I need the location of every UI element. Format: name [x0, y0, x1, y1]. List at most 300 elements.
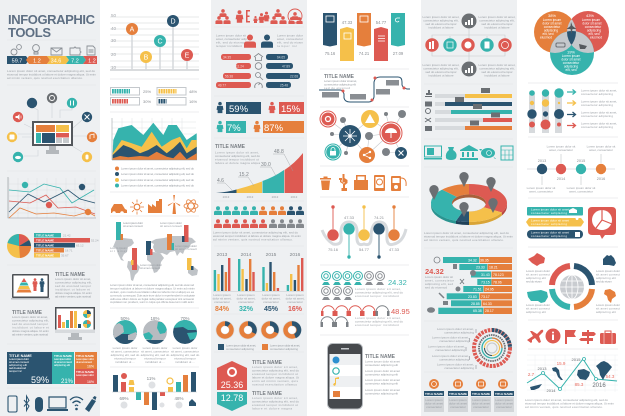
butterfly bars: 56.38: [225, 74, 233, 78]
map line chart: 2.7: [528, 372, 535, 377]
wavy timeline: 75.16: [328, 247, 339, 252]
world map with bars: Lorem ipsum dolor: [140, 263, 162, 267]
butterfly bars: 34.35: [223, 56, 231, 60]
globe ring with maps: adipiscing elit: [596, 310, 616, 314]
org chart: incididunt ut labore: [428, 26, 454, 30]
diverging bar chart: 11%: [147, 376, 155, 381]
footer text: eiusmod tempor incididunt ut labore et dolore magna aliqua. Ut enim: [525, 402, 614, 406]
tab bars: 74.21: [359, 51, 370, 56]
value 48.95: consectetur adipiscing elit, sed do: [355, 320, 403, 324]
four title cards: Lorem ipsum: [495, 398, 513, 402]
globes: eiusmod tempor: [174, 356, 196, 360]
radial chart: consectetur adipiscing: [439, 358, 469, 362]
text block: monitor: [12, 310, 50, 336]
label ribbons: consectetur adipiscing: [531, 222, 567, 226]
horizontal timeline: amet, consectetur: [549, 148, 573, 152]
venn diagram: eiusmod: [590, 36, 602, 40]
phone text: TITLE NAME: [365, 354, 396, 360]
arrows with text: consectetur adipiscing: [581, 125, 613, 129]
stacked horizontal bars: 31.43: [481, 273, 490, 277]
org chart: incididunt ut labore: [484, 26, 510, 30]
text block: monitor: incididunt ut labore et: [12, 326, 49, 330]
people percentage stats: 7%: [227, 123, 241, 134]
globe ring with maps: Lorem ipsum dolor: [596, 269, 620, 273]
venn diagram: Lorem ipsum: [562, 54, 581, 58]
text block: laptop: consectetur adipiscing elit,: [55, 280, 92, 284]
app icons around monitor: [7, 93, 97, 162]
globes: 50%: [120, 316, 130, 321]
laptop with pyramid: [11, 274, 50, 300]
org chart: sed do eiusmod tempor: [481, 70, 513, 74]
dashboard tiles: 16%: [87, 380, 94, 384]
label ribbons: Lorem ipsum dolor sit amet: [531, 230, 569, 234]
pipeline diagram: [319, 74, 410, 102]
yearly bar chart: consectetur: [238, 300, 254, 304]
growth area chart: [215, 144, 303, 199]
dashboard tiles: adipiscing elit: [54, 363, 70, 367]
horizontal bars: TITLE NAME: [36, 244, 54, 248]
org chart: consectetur adipiscing elit,: [479, 18, 515, 22]
value 24.32: eiusmod tempor incididunt: [355, 294, 399, 298]
org chart: sed do eiusmod tempor: [425, 70, 457, 74]
yearly bar chart: consectetur: [214, 300, 230, 304]
gender comparison: amet, consectetur: [277, 37, 303, 41]
world map with bars: Lorem ipsum: [110, 246, 128, 250]
stacked horizontal bars: 73.15: [481, 280, 490, 284]
text block: laptop: [55, 272, 92, 298]
pipeline diagram: sed do eiusmod: [324, 86, 350, 90]
world map with bars: [110, 221, 198, 281]
globes: eiusmod tempor: [144, 356, 166, 360]
wavy timeline: 47.33: [389, 247, 400, 252]
text block: laptop: incididunt ut labore et: [55, 288, 90, 292]
column 1: infographic tools: [7, 12, 99, 412]
area chart legend: Lorem ipsum dolor sit amet, consectetur adipiscing elit, sed do: [121, 166, 194, 170]
tab bars: 47.33: [342, 20, 353, 25]
venn diagram: consectetur: [544, 25, 561, 29]
people grid: [213, 206, 304, 242]
four title cards: consectetur: [496, 405, 512, 409]
world map with bars: sit amet consect: [123, 224, 143, 228]
area chart legend: Lorem ipsum dolor sit amet, consectetur adipiscing elit, sed do: [121, 184, 194, 188]
text blocks beside badges: consectetur adipiscing elit, sed do: [252, 368, 299, 372]
battery gauges: 25%: [143, 89, 151, 94]
gender comparison: amet, consectetur adip: [216, 37, 247, 41]
3D donut: [429, 172, 507, 225]
map line chart: 85.3: [575, 382, 584, 387]
radial chart: [428, 327, 510, 370]
text blocks beside badges: labore et dolore magna: [252, 406, 292, 410]
globe ring with maps: Lorem ipsum dolor: [596, 303, 620, 307]
tagged progress bars: [425, 88, 512, 131]
venn diagram: elit, sed: [542, 32, 554, 36]
dashboard tiles: sit amet consect: [76, 360, 92, 364]
map line chart: 2016: [592, 383, 606, 389]
butterfly bars: 25.48: [280, 84, 288, 88]
people icons row: [215, 9, 303, 24]
gender comparison: [216, 34, 304, 48]
map text: cupidatat non proident, sunt in culpa qui officia deserunt mollit anim: [110, 300, 194, 304]
globes: [111, 316, 200, 364]
globe ring with maps: sit amet consect: [526, 272, 550, 276]
donut gauges: Lorem ipsum dolor sit amet,: [226, 344, 256, 348]
org chart: incididunt ut labore: [428, 74, 454, 78]
radial chart: Lorem ipsum dolor sit amet,: [437, 362, 474, 366]
horizontal bars: [34, 233, 99, 258]
bubble matrix: [527, 88, 564, 133]
phone text: consectetur adipiscing elit: [365, 363, 398, 367]
world map with bars: Lorem ipsum dolor: [160, 221, 182, 225]
pie chart: [7, 234, 31, 258]
pipeline diagram: consectetur adipiscing elit: [324, 82, 356, 86]
stacked horizontal bars: 24.95: [485, 288, 494, 292]
horizontal timeline: Lorem ipsum dolor sit: [527, 186, 556, 190]
yearly bar chart: Lorem ipsum: [213, 293, 231, 297]
globe ring with maps: [526, 253, 620, 314]
globes: adipiscing elit, sed do: [111, 353, 140, 357]
donut text: ad minim veniam, quis nostrud exercitation ullamco.: [424, 238, 504, 242]
four title cards: dolor sit amet: [449, 402, 467, 406]
stacked horizontal bars: 64.33: [483, 302, 492, 306]
gender comparison: tempor inc: [277, 44, 298, 48]
four title cards: Lorem ipsum: [449, 398, 467, 402]
area chart legend: [115, 166, 194, 188]
org chart: sed do eiusmod tempor: [425, 22, 457, 26]
value 48.95: [355, 307, 410, 327]
text blocks beside badges: eiusmod tempor incididunt ut: [252, 372, 298, 376]
map line chart: 2013: [538, 366, 547, 371]
value ribbon: 1.2: [33, 58, 41, 64]
horizontal timeline: Lorem ipsum dolor sit: [567, 186, 596, 190]
bubble chart: D: [170, 18, 176, 26]
globe ring with maps: sit amet consect: [596, 306, 620, 310]
horizontal timeline: 2015: [577, 159, 585, 163]
intro text: eiusmod tempor incididunt ut labore et dolore magna aliqua. Ut enim: [7, 72, 96, 76]
dashboard tiles: Lorem ipsum dolor: [54, 357, 71, 361]
text blocks beside badges: TITLE NAME: [252, 391, 283, 397]
stacked horizontal bars: adipiscing elit, sed: [425, 282, 453, 286]
icon row: devices: [320, 174, 406, 191]
value ribbon: 34.6: [51, 58, 61, 64]
battery gauges: 48%: [189, 89, 197, 94]
butterfly bars: 47.89: [282, 64, 290, 68]
horizontal timeline: 2013: [538, 159, 546, 163]
yearly bar chart: Lorem ipsum: [286, 293, 304, 297]
stacked horizontal bars: Lorem ipsum dolor sit: [425, 275, 453, 279]
text block: monitor: TITLE NAME: [12, 310, 43, 316]
butterfly bars: 64.65: [277, 56, 285, 60]
four title cards: Lorem ipsum: [472, 398, 490, 402]
venn diagram: elit, sed: [566, 68, 577, 72]
dashboard tiles: 16%: [87, 364, 94, 368]
bubble chart: 30: [111, 38, 117, 43]
globes: eiusmod tempor: [114, 356, 136, 360]
arrows with text: consectetur adipiscing: [581, 114, 613, 118]
column 2: [110, 13, 200, 410]
text blocks beside badges: consectetur adipiscing elit, sed do: [252, 400, 299, 404]
venn diagram: 19%: [567, 50, 575, 54]
column 4: [319, 13, 410, 409]
growth area chart: 30.0: [261, 162, 271, 168]
label ribbons: consectetur adipiscing: [531, 234, 567, 238]
radial chart: consectetur adipiscing: [435, 348, 465, 352]
monitor hub: [18, 103, 88, 156]
globes: Lorem ipsum dolor: [173, 346, 197, 350]
people grid: eiusmod tempor incididunt ut labore et dolore magna aliqua. Ut enim: [213, 234, 302, 238]
world map with bars: Lorem ipsum dolor: [175, 244, 197, 248]
yearly bar chart: dolor sit amet,: [213, 296, 232, 300]
map line chart: [527, 355, 618, 393]
map text: Lorem ipsum dolor sit amet, consectetur adipiscing elit, sed do eiusmod: [110, 283, 194, 287]
value ribbon: [7, 56, 97, 64]
dashboard tiles: TITLE NAME: [54, 354, 72, 358]
globes: Lorem ipsum dolor: [143, 346, 167, 350]
title: INFOGRAPHIC: [8, 12, 96, 27]
dashboard tiles: Lorem ipsum dolor: [76, 373, 94, 377]
horizontal bars: TITLE NAME: [36, 254, 54, 258]
stacked horizontal bars: 36.35: [480, 258, 489, 262]
globes: adipiscing elit, sed do: [141, 353, 170, 357]
venn diagram: dolor sit amet: [542, 22, 562, 26]
dashboard tiles: adipiscing elit: [9, 363, 27, 367]
yearly bar chart: Lorem ipsum: [237, 293, 255, 297]
intro text: ad minim veniam, quis nostrud exercitation ullamco.: [7, 76, 83, 80]
phone text: consectetur adipiscing elit: [365, 392, 398, 396]
globe ring with maps: sed do eiusm: [526, 280, 542, 284]
four title cards: consectetur: [473, 405, 489, 409]
world map with bars: sit amet: [110, 249, 127, 253]
arrows with text: [567, 88, 617, 129]
value 48.95: 48.95: [391, 307, 410, 316]
wavy timeline: 54.77: [359, 247, 370, 252]
stacked horizontal bars: amet, consectetur: [425, 278, 454, 282]
stacked horizontal bars: 65.38: [473, 309, 482, 313]
world map with bars: sit amet consect: [140, 266, 160, 270]
donut gauges: Lorem ipsum dolor sit amet,: [270, 344, 300, 348]
four title cards: dolor sit amet: [495, 402, 513, 406]
text blocks beside badges: eiusmod tempor incididunt ut: [252, 403, 298, 407]
dashboard tiles: sit amet consect: [54, 360, 72, 364]
text blocks beside badges: labore et dolore magna aliqua. Ut: [252, 376, 299, 380]
horizontal timeline: Lorem ipsum dolor sit: [547, 144, 576, 148]
horizontal timeline: amet, consectetur: [569, 190, 593, 194]
text block: laptop: Lorem ipsum dolor sit amet,: [55, 277, 91, 281]
people percentage stats: [217, 102, 304, 134]
horizontal timeline: [527, 144, 616, 194]
four title cards: TITLE NAME: [472, 392, 490, 396]
venn diagram: dolor sit amet: [561, 58, 581, 62]
value 24.32: Lorem ipsum dolor sit amet,: [355, 287, 401, 291]
map text: commodo consequat. Duis aute irure dolor in reprehenderit in voluptate: [110, 294, 195, 298]
bubble chart: A: [130, 26, 135, 34]
stacked horizontal bars: 73.17: [481, 295, 490, 299]
people grid: ad minim veniam, quis nostrud exercitation ullamco.: [213, 238, 293, 242]
diverging bar chart: 48%: [174, 396, 184, 401]
donut text: Lorem ipsum dolor sit amet, consectetur adipiscing elit, sed do: [424, 231, 509, 235]
horizontal bars: 21.42: [63, 234, 71, 238]
org chart: Lorem ipsum dolor sit amet,: [422, 15, 460, 19]
yearly bar chart: 45%: [264, 306, 279, 313]
icon row: energy: [111, 195, 198, 215]
venn diagram: 43%: [586, 13, 594, 18]
radial chart: consectetur adipiscing: [439, 339, 469, 343]
globes: 18%: [150, 316, 160, 321]
network diagram: [320, 110, 407, 163]
arrows with text: Lorem ipsum dolor sit amet,: [581, 88, 617, 92]
growth area chart: 2013: [223, 195, 230, 199]
yearly bar chart: consectetur: [287, 300, 303, 304]
four title cards: TITLE NAME: [495, 392, 513, 396]
arrows with text: Lorem ipsum dolor sit amet,: [581, 100, 617, 104]
people percentage stats: 15%: [281, 104, 301, 115]
speech bubble pie: [588, 207, 616, 239]
text blocks beside badges: nostrud exercitation ullamco: [252, 382, 297, 386]
globe ring with maps: adipiscing elit: [526, 276, 546, 280]
donut gauges: consectetur adipiscing: [226, 347, 254, 351]
map text: tempor incididunt ut labore et dolore magna aliqua. Ut enim ad minim: [110, 286, 196, 290]
horizontal bars: 18.71: [65, 248, 73, 252]
line chart: [8, 177, 96, 218]
dashboard tiles: [7, 352, 97, 385]
yearly bar chart: 2015: [266, 252, 277, 258]
label ribbons: consectetur adipiscing: [531, 211, 567, 215]
area chart legend: Lorem ipsum dolor sit amet, consectetur adipiscing elit, sed do: [121, 178, 194, 182]
phone text: Lorem ipsum dolor sit amet: [365, 378, 400, 382]
device icons: [8, 396, 96, 412]
growth area chart: consectetur adipiscing elit, sed do: [215, 154, 260, 158]
stacked horizontal bars: 28.17: [485, 309, 494, 313]
donut text: eiusmod tempor incididunt ut labore et dolore magna aliqua. Ut enim: [424, 234, 514, 238]
yearly bar chart: Lorem ipsum: [262, 293, 280, 297]
globes: sit amet, consectetur: [171, 350, 199, 354]
venn diagram: [534, 11, 609, 75]
stacked horizontal bars: sed do eiusmod: [425, 286, 447, 290]
text block: laptop: ad minim veniam, quis nostrud: [55, 294, 91, 298]
globes: Lorem ipsum dolor: [113, 346, 137, 350]
bubble chart: B: [144, 54, 149, 62]
text blocks beside badges: TITLE NAME: [252, 360, 283, 366]
phone text: Lorem ipsum dolor sit amet: [365, 388, 400, 392]
world map with bars: Lorem ipsum dolor: [123, 221, 143, 225]
growth area chart: 4.6: [217, 178, 224, 184]
people percentage stats: 87%: [264, 123, 284, 134]
stacked horizontal bars: 78.06: [493, 280, 502, 284]
text block: monitor: ad minim veniam, quis nostrud: [12, 332, 48, 336]
venn diagram: eiusmod: [540, 36, 552, 40]
radial chart: Lorem ipsum dolor sit amet,: [432, 354, 469, 358]
growth area chart: labore et dolore magna aliqua: [215, 161, 260, 165]
yearly bar chart: dolor sit amet,: [286, 296, 305, 300]
hexagon badges: [217, 361, 247, 411]
bubble chart: 50: [111, 13, 117, 18]
org chart: [422, 14, 516, 78]
four title cards: dolor sit amet: [472, 402, 490, 406]
donut gauges: [216, 320, 302, 351]
stacked horizontal bars: 23.33: [476, 266, 485, 270]
four title cards: Lorem ipsum: [425, 398, 443, 402]
yearly bar chart: dolor sit amet,: [237, 296, 256, 300]
org chart: Lorem ipsum dolor sit amet,: [478, 15, 516, 19]
horizontal bars: TITLE NAME: [36, 248, 54, 252]
icon row: travel: [527, 328, 616, 344]
arrows with text: Lorem ipsum dolor sit amet,: [581, 110, 617, 114]
venn diagram: Lorem ipsum: [582, 18, 601, 22]
smartphone: [328, 344, 362, 409]
yearly bar chart: 2016: [290, 252, 301, 258]
yearly bar chart: 32%: [239, 306, 254, 313]
gender comparison: Lorem ipsum dolor: [277, 34, 303, 38]
column 3: [213, 9, 305, 411]
butterfly bars: 22.68: [290, 74, 298, 78]
title: [8, 12, 96, 40]
butterfly bars: [216, 54, 300, 88]
growth area chart: 2013: [247, 195, 254, 199]
growth area chart: TITLE NAME: [215, 144, 246, 150]
dashboard tiles: TITLE NAME: [9, 354, 32, 358]
growth area chart: 2013: [291, 195, 298, 199]
butterfly bars: 49.77: [218, 84, 226, 88]
org chart: Lorem ipsum dolor sit amet,: [422, 63, 460, 67]
headphones pictogram: [320, 306, 390, 327]
four title cards: consectetur: [426, 405, 442, 409]
value 48.95: eiusmod tempor incididunt: [355, 323, 399, 327]
stacked horizontal bars: 23.83: [468, 295, 477, 299]
label ribbons: Lorem ipsum dolor sit amet: [531, 218, 569, 222]
phone text: Lorem ipsum dolor sit amet: [365, 360, 400, 364]
label ribbons: [526, 207, 584, 238]
pipeline diagram: Lorem ipsum dolor sit amet,: [324, 79, 357, 83]
text block: monitor: dolore magna aliqua. Ut enim: [12, 329, 50, 333]
arrows with text: consectetur adipiscing: [581, 103, 613, 107]
dashboard tiles: 59%: [31, 375, 49, 385]
text block: laptop: dolore magna aliqua. Ut enim: [55, 291, 92, 295]
butterfly bars: 11.24: [236, 64, 244, 68]
bubble chart: 20: [111, 52, 117, 57]
column 6: [525, 11, 620, 409]
stacked horizontal bars: 78.123: [493, 273, 504, 277]
people grid: Lorem ipsum dolor sit amet, consectetur adipiscing elit, sed do: [213, 230, 298, 234]
org chart: consectetur adipiscing elit,: [423, 18, 459, 22]
webcam pictogram: [322, 272, 384, 300]
yearly bar chart: 2014: [241, 252, 252, 258]
horizontal bars: 35.67: [61, 254, 69, 258]
wavy timeline: 47.33: [344, 215, 355, 220]
growth area chart: eiusmod tempor incididunt ut: [215, 158, 259, 162]
hexagon badges: 25.36: [221, 380, 243, 390]
four title cards: consectetur: [450, 405, 466, 409]
gender comparison: tempor incididunt: [216, 44, 242, 48]
globe ring with maps: adipiscing elit: [526, 310, 546, 314]
dashboard tiles: Lorem ipsum dolor: [9, 357, 29, 361]
stacked horizontal bars: 34.32: [468, 258, 477, 262]
bubble chart: 10: [111, 65, 117, 70]
globes: adipiscing elit, sed do: [171, 353, 200, 357]
org chart: Lorem ipsum dolor sit amet,: [478, 63, 516, 67]
yearly bar chart: 16%: [288, 306, 303, 313]
phone text: consectetur adipiscing elit: [365, 382, 398, 386]
dashboard tiles: 21%: [61, 379, 74, 385]
yearly bar chart: [213, 252, 305, 313]
growth area chart: 48.8: [274, 149, 284, 155]
horizontal bars: TITLE NAME: [36, 238, 54, 242]
four title cards: TITLE NAME: [449, 392, 467, 396]
bubble chart: C: [157, 38, 163, 46]
tab bars: [323, 13, 405, 61]
map line chart: 2015: [572, 357, 581, 362]
venn diagram: dolor sit amet: [582, 22, 602, 26]
venn diagram: 38%: [548, 13, 556, 18]
hexagon badges: 12.78: [221, 393, 243, 403]
